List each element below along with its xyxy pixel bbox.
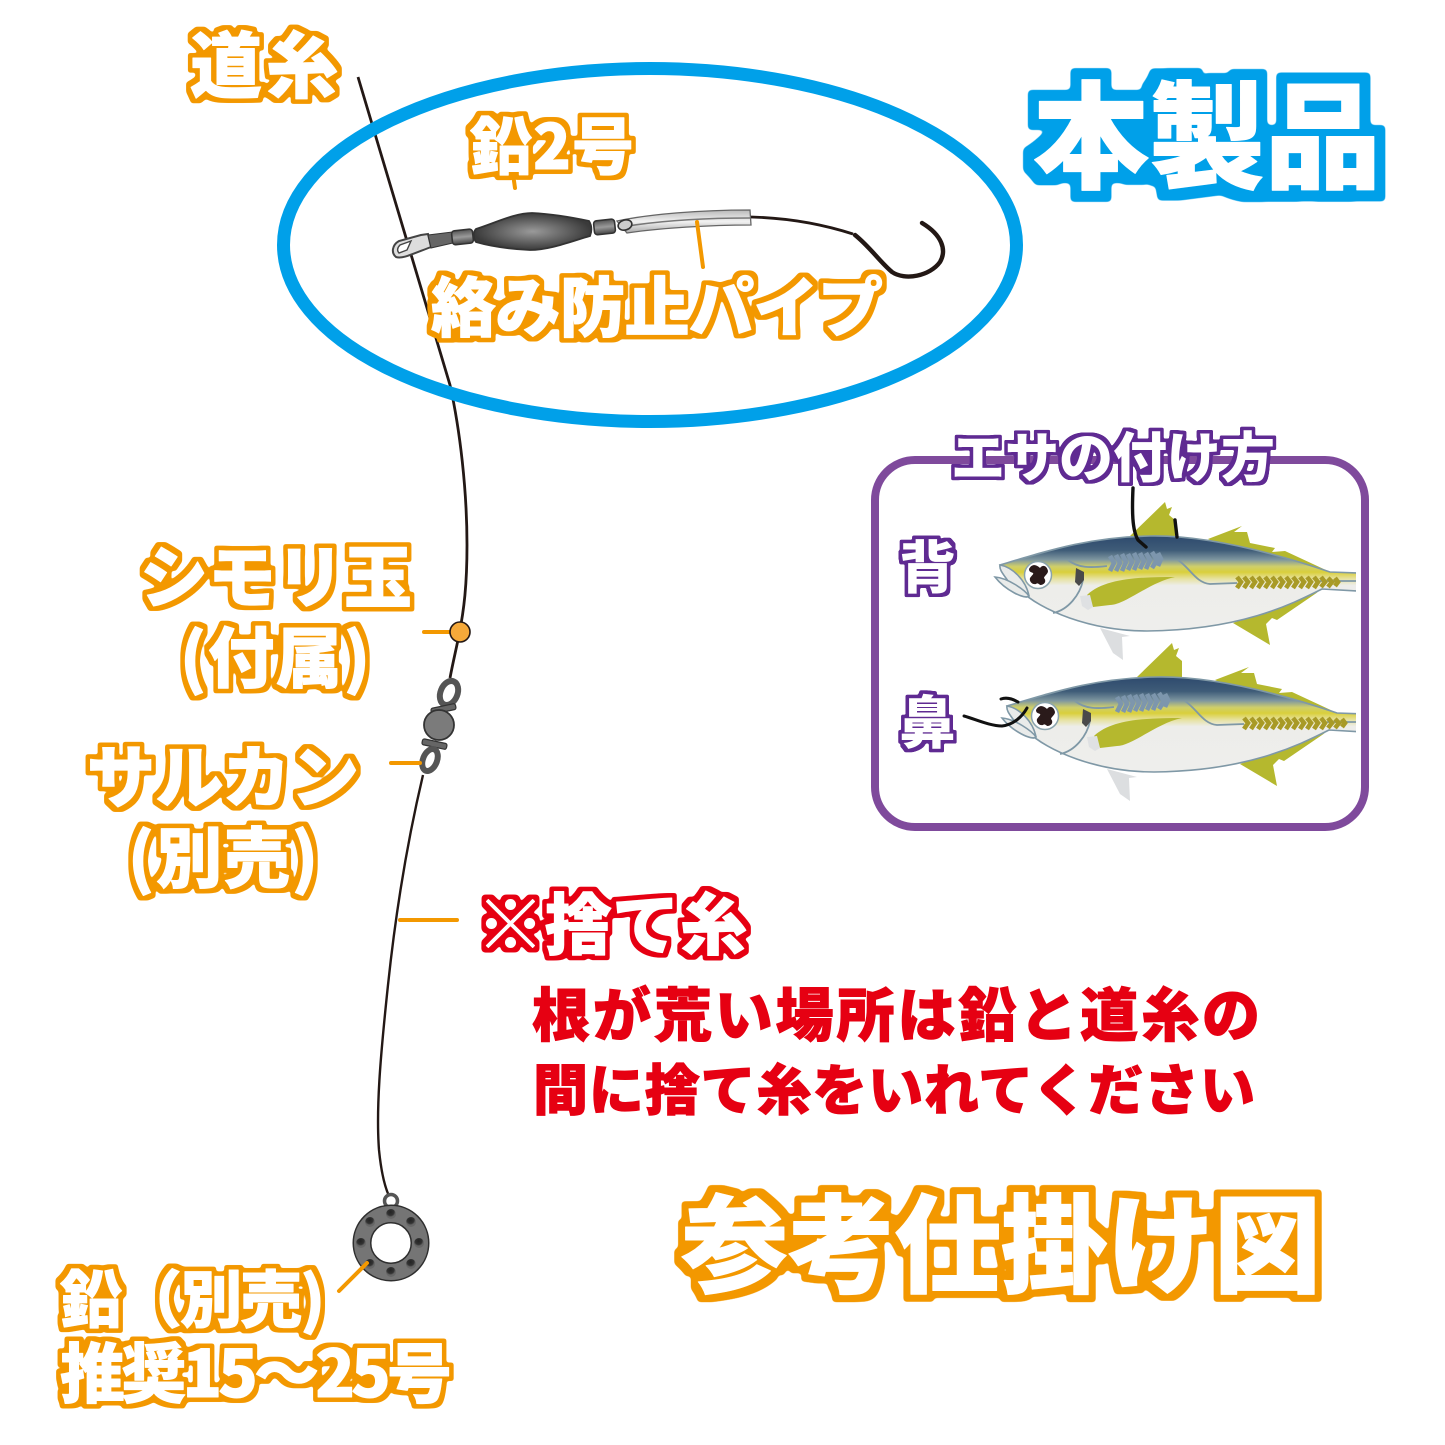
icon: hook in nose bbox=[964, 698, 1027, 726]
panel: how to attach bait bbox=[875, 414, 1365, 827]
leader: pipe bbox=[697, 222, 703, 267]
fish: nose hooking bbox=[1002, 643, 1364, 801]
label: 鉛(別売): 鉛（別売) bbox=[60, 1250, 325, 1340]
label: 絡み防止パイプ: 絡み防止パイプ bbox=[431, 256, 883, 350]
lead sinker bbox=[474, 213, 591, 250]
leader: ring sinker bbox=[339, 1263, 367, 1291]
icon: barrel swivel bbox=[419, 678, 462, 773]
label: ※捨て糸: ※捨て糸 bbox=[477, 872, 747, 969]
note text bbox=[532, 969, 1260, 1126]
icon: bead bbox=[450, 622, 470, 642]
swivel barrels bbox=[451, 229, 474, 245]
ellipse: this product highlight bbox=[284, 68, 1016, 422]
leader: lead 2 bbox=[513, 174, 515, 188]
label: 推奨15〜25号: 推奨15～25号 bbox=[60, 1322, 452, 1416]
fishing line: sacrificial line bbox=[378, 775, 423, 1196]
title: 本製品: 本製品 bbox=[1033, 45, 1381, 213]
note text: 間に捨て糸をいれてください bbox=[533, 1046, 1255, 1126]
heading: エサの付け方: エサの付け方 bbox=[951, 414, 1275, 493]
snap bbox=[393, 234, 431, 258]
label: (付属): (付属) bbox=[180, 606, 370, 702]
label: サルカン: サルカン bbox=[87, 723, 359, 822]
leader: bead bbox=[424, 630, 452, 634]
label: (別売): (別売) bbox=[128, 806, 318, 902]
leader: sacrificial line bbox=[400, 918, 457, 922]
note text: 根が荒い場所は鉛と道糸の bbox=[532, 969, 1260, 1053]
icon: product rig with lead, pipe and hook bbox=[393, 210, 943, 277]
label: シモリ玉: シモリ玉 bbox=[140, 523, 412, 622]
label: 道糸: 道糸 bbox=[190, 8, 338, 113]
title: 参考仕掛け図: 参考仕掛け図 bbox=[681, 1160, 1321, 1315]
tangle prevention pipe bbox=[617, 210, 751, 233]
icon: ring sinker bbox=[356, 1194, 424, 1277]
hook and leader bbox=[751, 217, 853, 234]
fishing line: main line upper bbox=[358, 77, 467, 678]
label: 鉛2号: 鉛2号 bbox=[470, 97, 634, 187]
icon: hook in back bbox=[1133, 488, 1177, 547]
label: 鼻: 鼻 bbox=[899, 678, 956, 760]
leader: swivel bbox=[391, 761, 420, 765]
label: 背: 背 bbox=[899, 523, 956, 605]
fish: back hooking bbox=[995, 502, 1357, 660]
